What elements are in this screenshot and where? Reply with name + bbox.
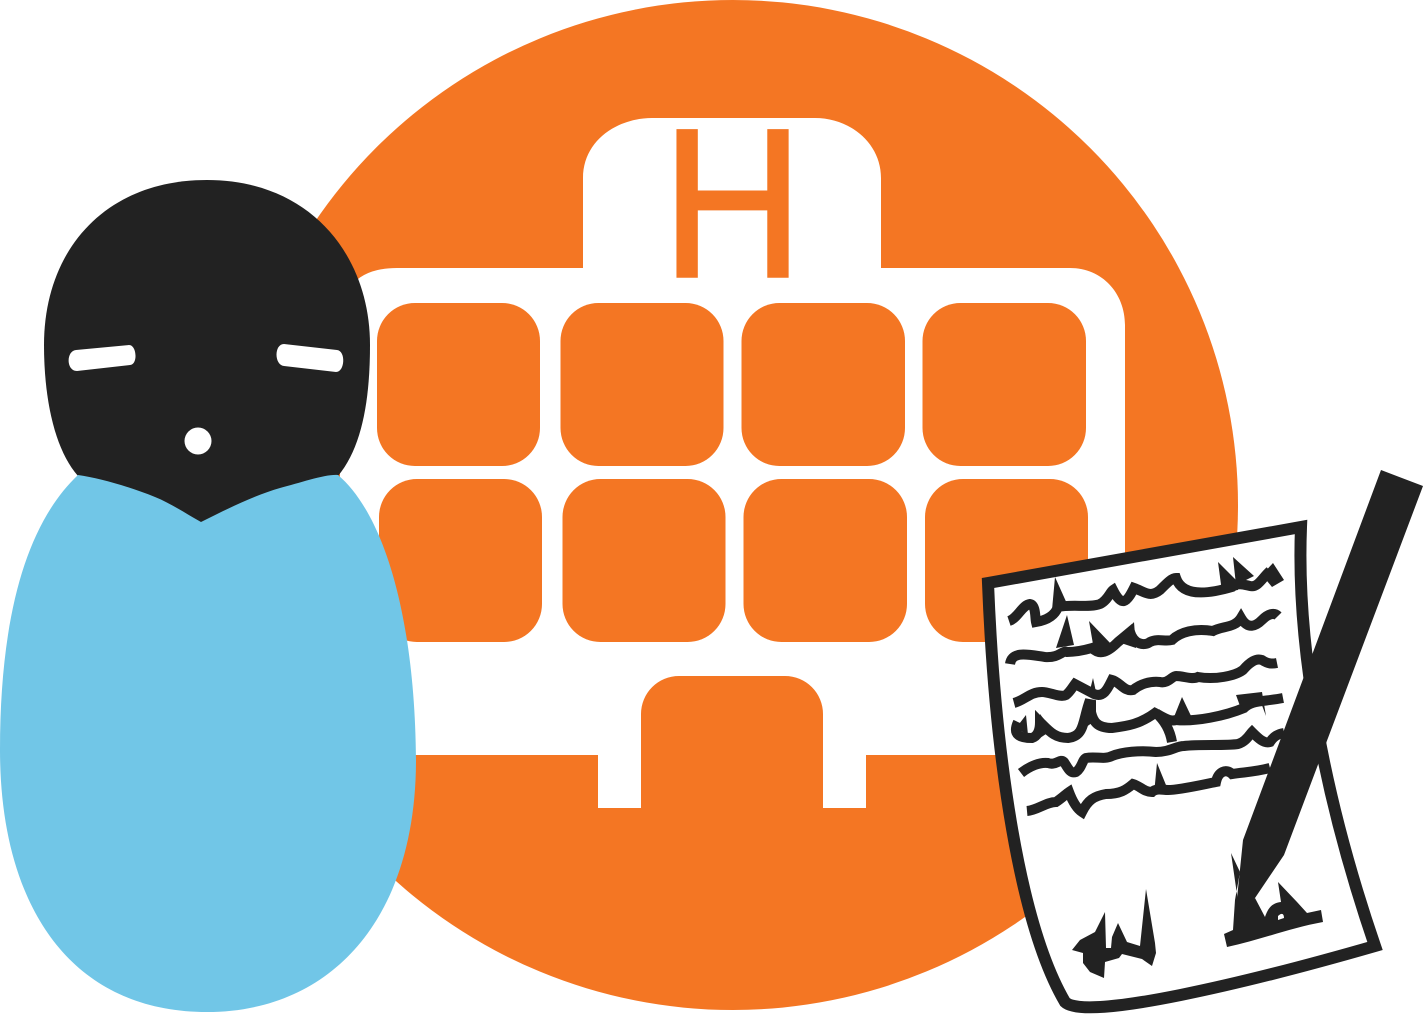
handwriting spikes [1016,557,1284,794]
icon: hospital building [340,86,1125,808]
icon: person [0,180,416,1012]
pen [1234,470,1423,928]
orange background circle [228,0,1238,1010]
windows upper row [377,303,1086,466]
person body [0,475,416,1012]
person head [44,180,370,530]
icon: document [988,470,1423,1007]
paper sheet [988,527,1375,1007]
mouth [184,428,212,454]
signature left [1072,889,1156,978]
signature right [1224,853,1323,947]
right eye [276,344,343,372]
building silhouette [340,118,1125,808]
windows lower row [379,479,1088,642]
handwritten text lines [1009,571,1284,812]
left eye [69,345,136,371]
hospital letter H: H [662,86,803,322]
